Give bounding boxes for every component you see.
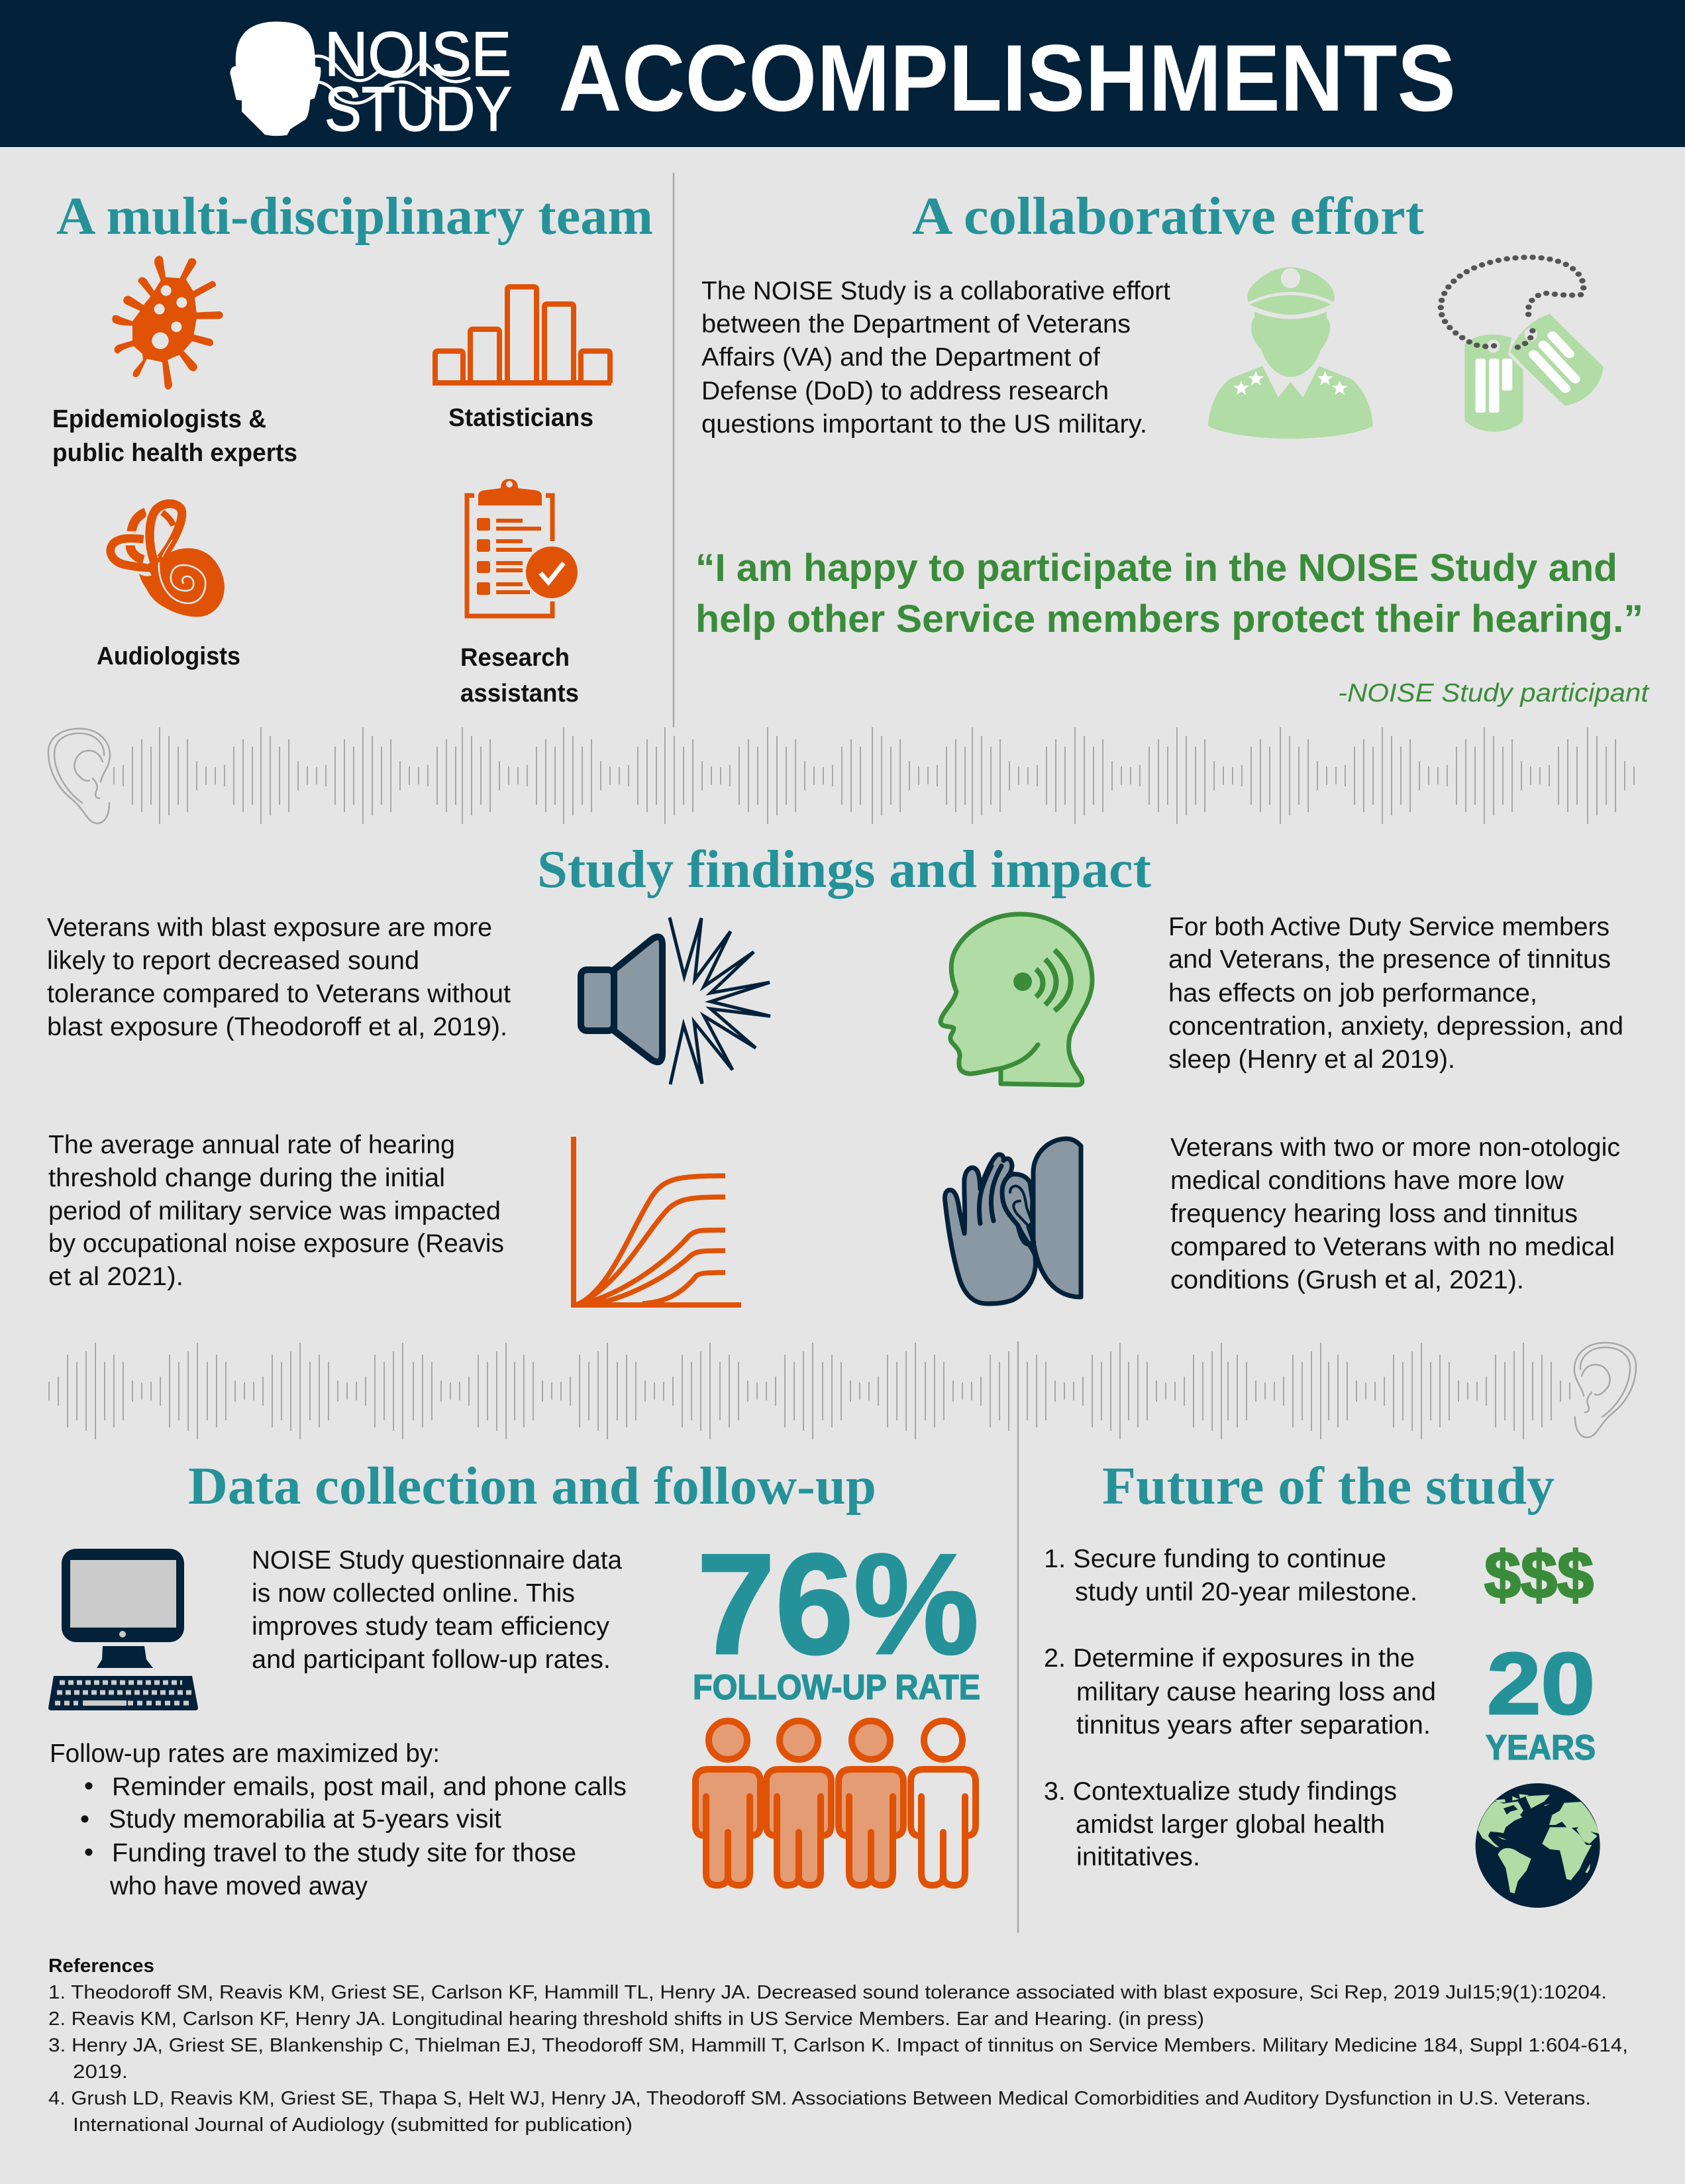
text block	[701, 277, 1170, 439]
follow-up list: who have moved away	[109, 1872, 368, 1900]
icon: hand cupped to ear	[945, 1139, 1081, 1304]
follow-up list: Reminder emails, post mail, and phone calls	[112, 1773, 627, 1801]
list item 1: study until 20-year milestone.	[1075, 1578, 1417, 1606]
finding: hearing threshold text: et al 2021).	[48, 1263, 183, 1291]
follow-up list	[50, 1740, 627, 1900]
finding: medical conditions text: compared to Veterans with no medical	[1170, 1233, 1615, 1261]
follow-up list: Follow-up rates are maximized by:	[50, 1740, 440, 1768]
panel: study findings and impact	[47, 841, 1623, 1305]
finding: medical conditions text: conditions (Grush et al, 2021).	[1170, 1266, 1524, 1294]
online data text: improves study team efficiency	[252, 1612, 610, 1641]
list item 3	[1044, 1777, 1397, 1871]
text block: Defense (DoD) to address research	[701, 377, 1109, 405]
logo wordmark: STUDY	[325, 74, 512, 144]
text block: Affairs (VA) and the Department of	[701, 343, 1100, 372]
finding: hearing threshold text	[48, 1131, 504, 1291]
finding: medical conditions text	[1170, 1133, 1620, 1294]
logo wordmark: NOISE	[325, 19, 511, 89]
label: epidemiologists: public health experts	[52, 439, 297, 467]
heading: Study findings and impact	[537, 841, 1151, 899]
list item 2: tinnitus years after separation.	[1076, 1711, 1431, 1740]
list item 3: inititatives.	[1076, 1843, 1200, 1871]
follow-up list: Study memorabilia at 5-years visit	[109, 1805, 501, 1834]
panel: future of the study	[1044, 1457, 1600, 1908]
icon: inner ear cochlea	[111, 503, 225, 617]
icon: globe	[1476, 1783, 1600, 1908]
finding: medical conditions text: Veterans with two or more non-otologic	[1170, 1133, 1620, 1162]
title: ACCOMPLISHMENTS	[558, 26, 1456, 131]
finding: tinnitus text: has effects on job performance,	[1168, 979, 1537, 1008]
finding: tinnitus text: For both Active Duty Service members	[1168, 913, 1609, 941]
statistic: 76%: 76%	[697, 1524, 979, 1684]
quote: “I am happy to participate in the NOISE Study and	[695, 546, 1617, 590]
heading: Data collection and follow-up	[188, 1457, 876, 1516]
list item 3: 3. Contextualize study findings	[1044, 1777, 1397, 1806]
finding: medical conditions text: frequency hearing loss and tinnitus	[1170, 1200, 1578, 1228]
finding: hearing threshold text: The average annual rate of hearing	[48, 1131, 455, 1159]
references: 4. Grush LD, Reavis KM, Griest SE, Thapa S, Helt WJ, Henry JA, Theodoroff SM. Associations Between Medical Comorbidities and Auditory Dysfunction in U.S. Veterans.	[48, 2088, 1591, 2109]
online data text: NOISE Study questionnaire data	[252, 1546, 622, 1575]
icon: loudspeaker blast	[581, 917, 770, 1084]
statistic: 20 years	[1486, 1635, 1596, 1767]
heading: A collaborative effort	[912, 187, 1424, 246]
icon: dog tags	[1441, 257, 1604, 432]
finding: blast exposure text: blast exposure (Theodoroff et al, 2019).	[47, 1013, 507, 1041]
logo: NOISE Study	[230, 19, 512, 144]
statistic: 20 years: YEARS	[1486, 1728, 1596, 1767]
list item 3: amidst larger global health	[1076, 1810, 1385, 1839]
finding: tinnitus text: sleep (Henry et al 2019).	[1168, 1045, 1455, 1074]
online data text: and participant follow-up rates.	[252, 1645, 611, 1674]
references: 2. Reavis KM, Carlson KF, Henry JA. Longitudinal hearing threshold shifts in US Service Members. Ear and Hearing. (in press)	[48, 2008, 1204, 2030]
label: epidemiologists: Epidemiologists &	[52, 405, 266, 433]
references: International Journal of Audiology (submitted for publication)	[73, 2114, 633, 2136]
online data text	[252, 1546, 622, 1674]
icon: threshold line chart	[574, 1137, 741, 1305]
label: audiologists: Audiologists	[97, 643, 240, 670]
references: 3. Henry JA, Griest SE, Blankenship C, Thielman EJ, Theodoroff SM, Hammill T, Carlson K. Impact of tinnitus on Service Members. Military Medicine 184, Suppl 1:604-614,	[48, 2035, 1628, 2056]
icon: desktop computer	[48, 1549, 198, 1710]
statistic: 20 years: 20	[1487, 1635, 1595, 1732]
logo wordmark	[325, 19, 512, 144]
list item 2	[1044, 1644, 1436, 1740]
finding: tinnitus text: concentration, anxiety, depression, and	[1168, 1012, 1623, 1041]
icon: clipboard	[467, 479, 578, 616]
vertical divider bottom	[1017, 1341, 1019, 1933]
finding: blast exposure text: Veterans with blast exposure are more	[47, 913, 492, 942]
references: 1. Theodoroff SM, Reavis KM, Griest SE, Carlson KF, Hammill TL, Henry JA. Decreased sound tolerance associated with blast exposure, Sci Rep, 2019 Jul15;9(1):10204.	[48, 1982, 1607, 2003]
icon: military officer	[1208, 267, 1373, 439]
label: statisticians: Statisticians	[448, 404, 593, 432]
finding: blast exposure text: likely to report decreased sound	[47, 947, 419, 975]
finding: hearing threshold text: by occupational noise exposure (Reavis	[48, 1229, 504, 1258]
finding: medical conditions text: medical conditions have more low	[1170, 1167, 1564, 1195]
statistic label: FOLLOW-UP RATE	[693, 1668, 980, 1707]
list item 2: 2. Determine if exposures in the	[1044, 1644, 1415, 1673]
text block: The NOISE Study is a collaborative effort	[701, 277, 1170, 305]
finding: hearing threshold text: threshold change during the initial	[48, 1164, 445, 1192]
vertical divider top	[673, 173, 674, 727]
label: research assistants: assistants	[460, 680, 579, 707]
sound wave lines	[315, 56, 469, 103]
icon: head with tinnitus	[941, 914, 1092, 1085]
waveform with ear, bottom	[3, 1343, 1636, 1439]
finding: blast exposure text: tolerance compared to Veterans without	[47, 980, 511, 1008]
finding: tinnitus text	[1168, 913, 1623, 1074]
heading: A multi-disciplinary team	[56, 187, 653, 246]
waveform with ear, top	[48, 727, 1680, 824]
panel: multi-disciplinary team	[52, 187, 653, 707]
panel: data collection and follow-up	[48, 1457, 980, 1900]
quote: help other Service members protect their hearing.”	[695, 598, 1643, 641]
quote	[695, 546, 1643, 641]
label: epidemiologists	[52, 405, 297, 467]
icon: bar chart	[433, 287, 611, 383]
list item 1: 1. Secure funding to continue	[1044, 1545, 1386, 1573]
label: research assistants: Research	[460, 644, 570, 672]
online data text: is now collected online. This	[252, 1579, 575, 1608]
finding: blast exposure text	[47, 913, 511, 1041]
heading: Future of the study	[1102, 1457, 1555, 1516]
text block: between the Department of Veterans	[701, 310, 1131, 338]
icon: people follow-up	[695, 1721, 976, 1885]
references: 2019.	[73, 2061, 128, 2083]
panel: collaborative effort	[695, 187, 1650, 707]
references: References	[48, 1955, 154, 1977]
list item 2: military cause hearing loss and	[1076, 1678, 1436, 1706]
list item 1	[1044, 1545, 1417, 1606]
follow-up list: Funding travel to the study site for those	[112, 1839, 576, 1867]
quote attribution: -NOISE Study participant	[1338, 679, 1650, 707]
label: research assistants	[460, 644, 579, 707]
finding: tinnitus text: and Veterans, the presence of tinnitus	[1168, 945, 1611, 974]
finding: hearing threshold text: period of military service was impacted	[48, 1197, 501, 1225]
text block: questions important to the US military.	[701, 410, 1147, 439]
header banner	[0, 0, 1685, 147]
icon: virus	[112, 256, 223, 390]
icon: dollar signs: $$$	[1484, 1538, 1594, 1612]
icon: head silhouette	[230, 22, 321, 136]
references	[48, 1955, 1628, 2136]
